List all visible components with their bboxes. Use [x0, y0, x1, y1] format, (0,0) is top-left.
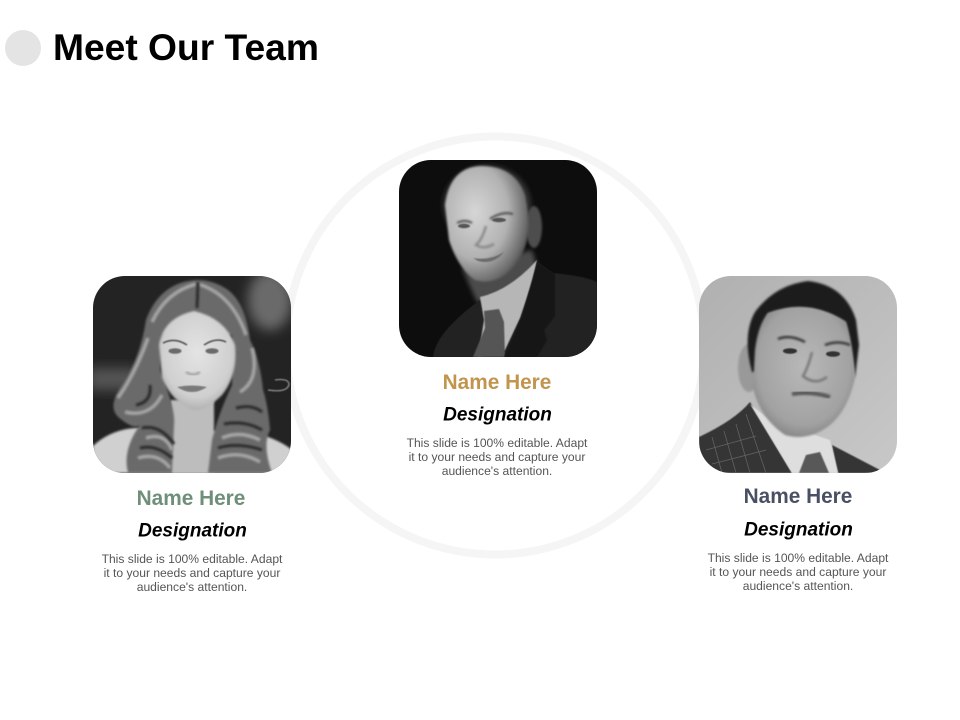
- brows: [778, 337, 850, 345]
- name: Name Here: [443, 371, 551, 394]
- ear: [738, 344, 754, 392]
- hair shadows: [136, 282, 262, 458]
- photo: left team member: [88, 270, 292, 473]
- nose: [186, 372, 200, 374]
- ear: [526, 206, 542, 248]
- designation: Designation: [744, 520, 853, 540]
- text block: left team member: [102, 487, 283, 594]
- hair: [748, 281, 859, 378]
- neck and chest: [170, 400, 214, 473]
- shirt collar: [750, 404, 838, 473]
- title marker circle: [5, 30, 41, 66]
- face: [159, 311, 235, 410]
- mouth and moustache: [792, 393, 830, 397]
- name: Name Here: [744, 485, 852, 508]
- text block: right team member: [708, 485, 889, 593]
- description: This slide is 100% editable. Adapt: [102, 552, 283, 566]
- head: [445, 166, 529, 282]
- name: Name Here: [137, 487, 245, 510]
- description: This slide is 100% editable. Adapt: [708, 551, 889, 565]
- shoulders: [93, 428, 291, 473]
- description: audience's attention.: [442, 464, 552, 478]
- description: audience's attention.: [137, 580, 247, 594]
- designation: Designation: [443, 404, 552, 426]
- light background patches: [248, 270, 292, 330]
- photo: right team member: [699, 276, 897, 473]
- hair curl: [268, 380, 289, 391]
- tie: [473, 309, 505, 357]
- background ring: [286, 136, 704, 554]
- lips: [177, 386, 207, 392]
- designation: Designation: [138, 520, 247, 542]
- description: it to your needs and capture your: [409, 450, 585, 464]
- eyes: [168, 348, 182, 354]
- description: This slide is 100% editable. Adapt: [407, 436, 588, 450]
- description: audience's attention.: [743, 579, 853, 593]
- mouth: [473, 252, 504, 262]
- face: [753, 307, 855, 437]
- suit: [699, 402, 880, 473]
- photo: centre team member: [399, 160, 597, 357]
- suit: [433, 262, 597, 357]
- pinstripes: [706, 414, 766, 473]
- text block: centre team member: [407, 371, 588, 478]
- eyes: [783, 348, 797, 354]
- shirt: [478, 260, 537, 357]
- hair fringe: [441, 163, 533, 222]
- description: it to your needs and capture your: [104, 566, 280, 580]
- lapel: [504, 262, 555, 357]
- tie: [799, 452, 829, 473]
- description: it to your needs and capture your: [710, 565, 886, 579]
- brows and eyes: [457, 213, 513, 223]
- nose: [803, 352, 827, 381]
- title: Meet Our Team: [53, 26, 319, 68]
- neck: [460, 248, 538, 302]
- nose: [476, 226, 494, 247]
- brows: [163, 340, 226, 345]
- hair highlights: [118, 284, 260, 468]
- hair mass: [113, 280, 272, 473]
